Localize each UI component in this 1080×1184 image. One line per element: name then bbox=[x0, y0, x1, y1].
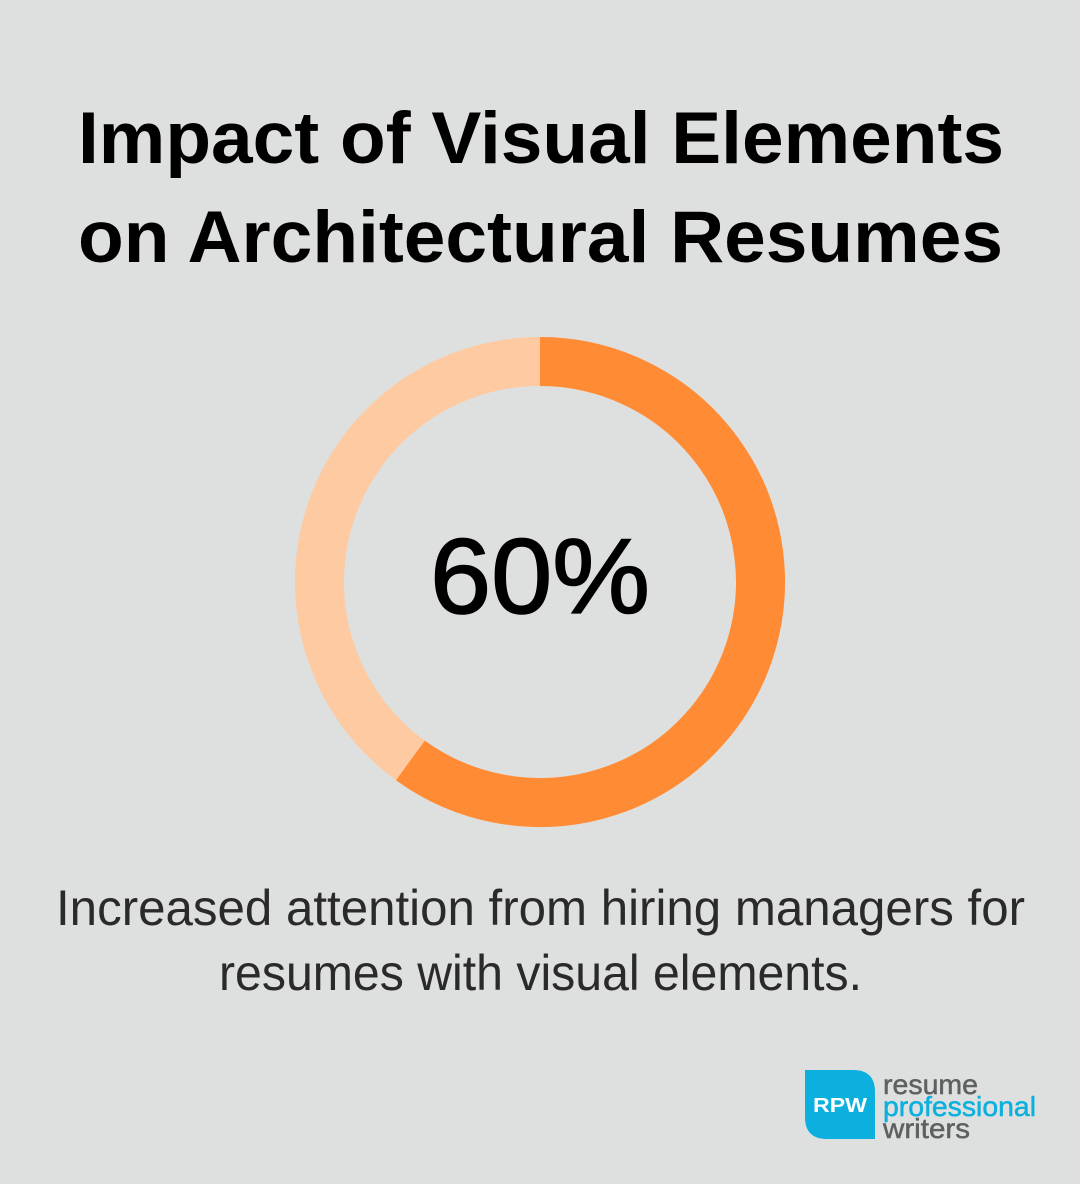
wordmark: writers bbox=[882, 1113, 970, 1144]
donut chart: 60% bbox=[320, 362, 760, 802]
caption: Increased attention from hiring managers for bbox=[56, 880, 1025, 936]
title: on Architectural Resumes bbox=[78, 197, 1003, 278]
caption bbox=[56, 880, 1025, 1001]
wordmark: resume bbox=[883, 1069, 978, 1100]
title: Impact of Visual Elements bbox=[78, 98, 1004, 179]
icon: RPW badge: RPW bbox=[813, 1095, 867, 1117]
wordmark bbox=[882, 1069, 1036, 1144]
logo: resume professional writers bbox=[805, 1069, 1036, 1144]
title bbox=[78, 98, 1004, 278]
value: 60%: 60% bbox=[430, 516, 650, 636]
wordmark: professional bbox=[883, 1091, 1036, 1122]
caption: resumes with visual elements. bbox=[219, 945, 862, 1001]
icon: RPW badge bbox=[805, 1070, 875, 1139]
